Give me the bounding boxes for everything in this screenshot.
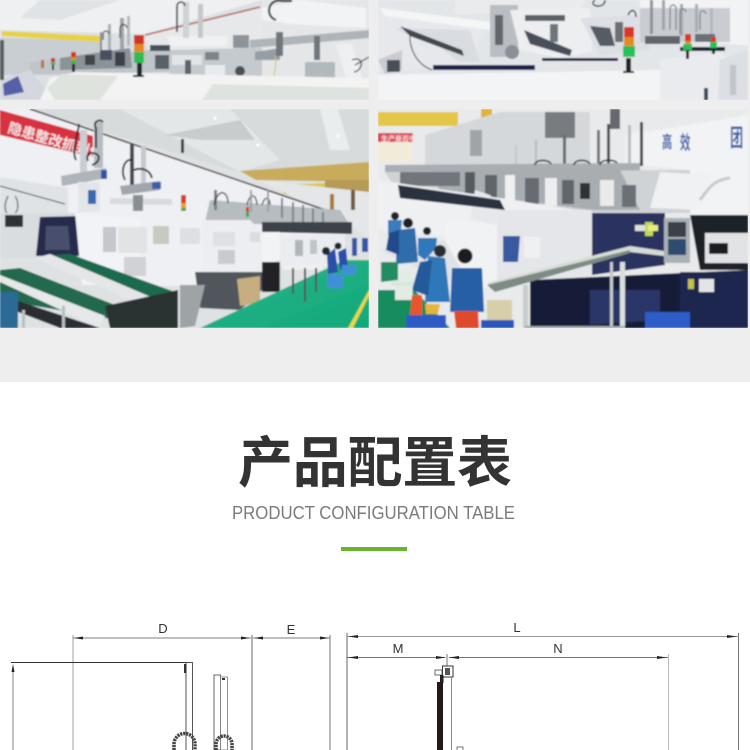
photo: robot arms row, top left (0, 0, 369, 100)
arm head and column (435, 666, 463, 750)
photo: injection moulding workshop, bottom left: 隐患整改抓到位 (6, 120, 105, 162)
label: N: N (553, 641, 563, 656)
label: D: D (158, 621, 168, 636)
workers (381, 212, 484, 328)
green accent bar (341, 547, 407, 551)
photo section band (0, 0, 750, 382)
photo: workers at production line, bottom right: 生产是否中 (381, 134, 416, 143)
banner lettering on wall: 团 (730, 125, 743, 152)
diagram: side view dimensions (11, 621, 330, 750)
label: E: E (287, 622, 296, 637)
photo: injection moulding workshop, bottom left (0, 109, 369, 328)
diagram: front view dimensions (347, 620, 738, 750)
photo: workers at production line, bottom right (378, 109, 748, 328)
banner lettering on wall: 高 (662, 132, 672, 152)
conveyor belts (0, 254, 178, 328)
photo: robot arms row, top right (378, 0, 748, 100)
banner lettering on wall: 效 (680, 132, 690, 154)
label: M: M (393, 641, 403, 656)
label: L: L (513, 620, 521, 635)
arm column one (174, 662, 195, 750)
robot arm two (110, 144, 172, 211)
robot arm one (61, 120, 107, 212)
subtitle: PRODUCT CONFIGURATION TABLE (232, 502, 515, 523)
title: 产品配置表 (238, 432, 512, 494)
arm column two (214, 675, 232, 750)
banner lettering on wall (662, 125, 743, 154)
